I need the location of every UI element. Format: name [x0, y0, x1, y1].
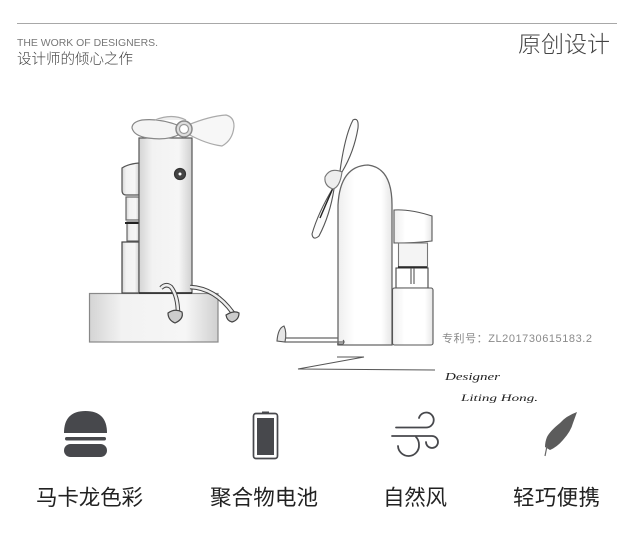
- stand foot: [277, 326, 286, 342]
- baseline scribble: [298, 357, 435, 370]
- side fan blades: [340, 119, 358, 172]
- feature labels: [36, 486, 600, 510]
- icon: battery: [254, 412, 278, 458]
- side cartridge: [122, 163, 139, 293]
- base block: [90, 294, 218, 342]
- icon: wind: [392, 413, 438, 456]
- neck: [396, 268, 428, 288]
- icon: feather: [545, 412, 577, 456]
- cartridge cap: [394, 210, 432, 243]
- button: [174, 168, 186, 180]
- designer signature: [444, 372, 538, 403]
- label: polymer battery: 聚合物电池: [210, 486, 318, 510]
- patent number: 专利号：ZL201730615183.2: [442, 331, 592, 345]
- label: natural wind: 自然风: [383, 486, 447, 510]
- header: left subtitle: [17, 37, 158, 68]
- header: left subtitle: THE WORK OF DESIGNERS.: [17, 37, 158, 49]
- designer signature: Liting Hong.: [459, 393, 538, 403]
- main body: [139, 138, 192, 293]
- designer signature: Designer: [444, 372, 500, 383]
- header: left subtitle: 设计师的倾心之作: [17, 51, 133, 68]
- side body: [338, 165, 392, 345]
- hub: [176, 121, 192, 137]
- label: lightweight portable: 轻巧便携: [513, 486, 600, 510]
- lanyards: [161, 285, 178, 314]
- icon: burger: [64, 411, 107, 457]
- side view sketch of fan: [277, 119, 433, 345]
- side hub: [325, 170, 342, 189]
- header: section title: 原创设计: [518, 31, 610, 57]
- label: macaron colours: 马卡龙色彩: [36, 486, 143, 510]
- fan blades: [132, 120, 180, 139]
- front view sketch of fan: [90, 115, 239, 342]
- clear tank: [398, 243, 428, 267]
- lower cartridge: [392, 288, 433, 345]
